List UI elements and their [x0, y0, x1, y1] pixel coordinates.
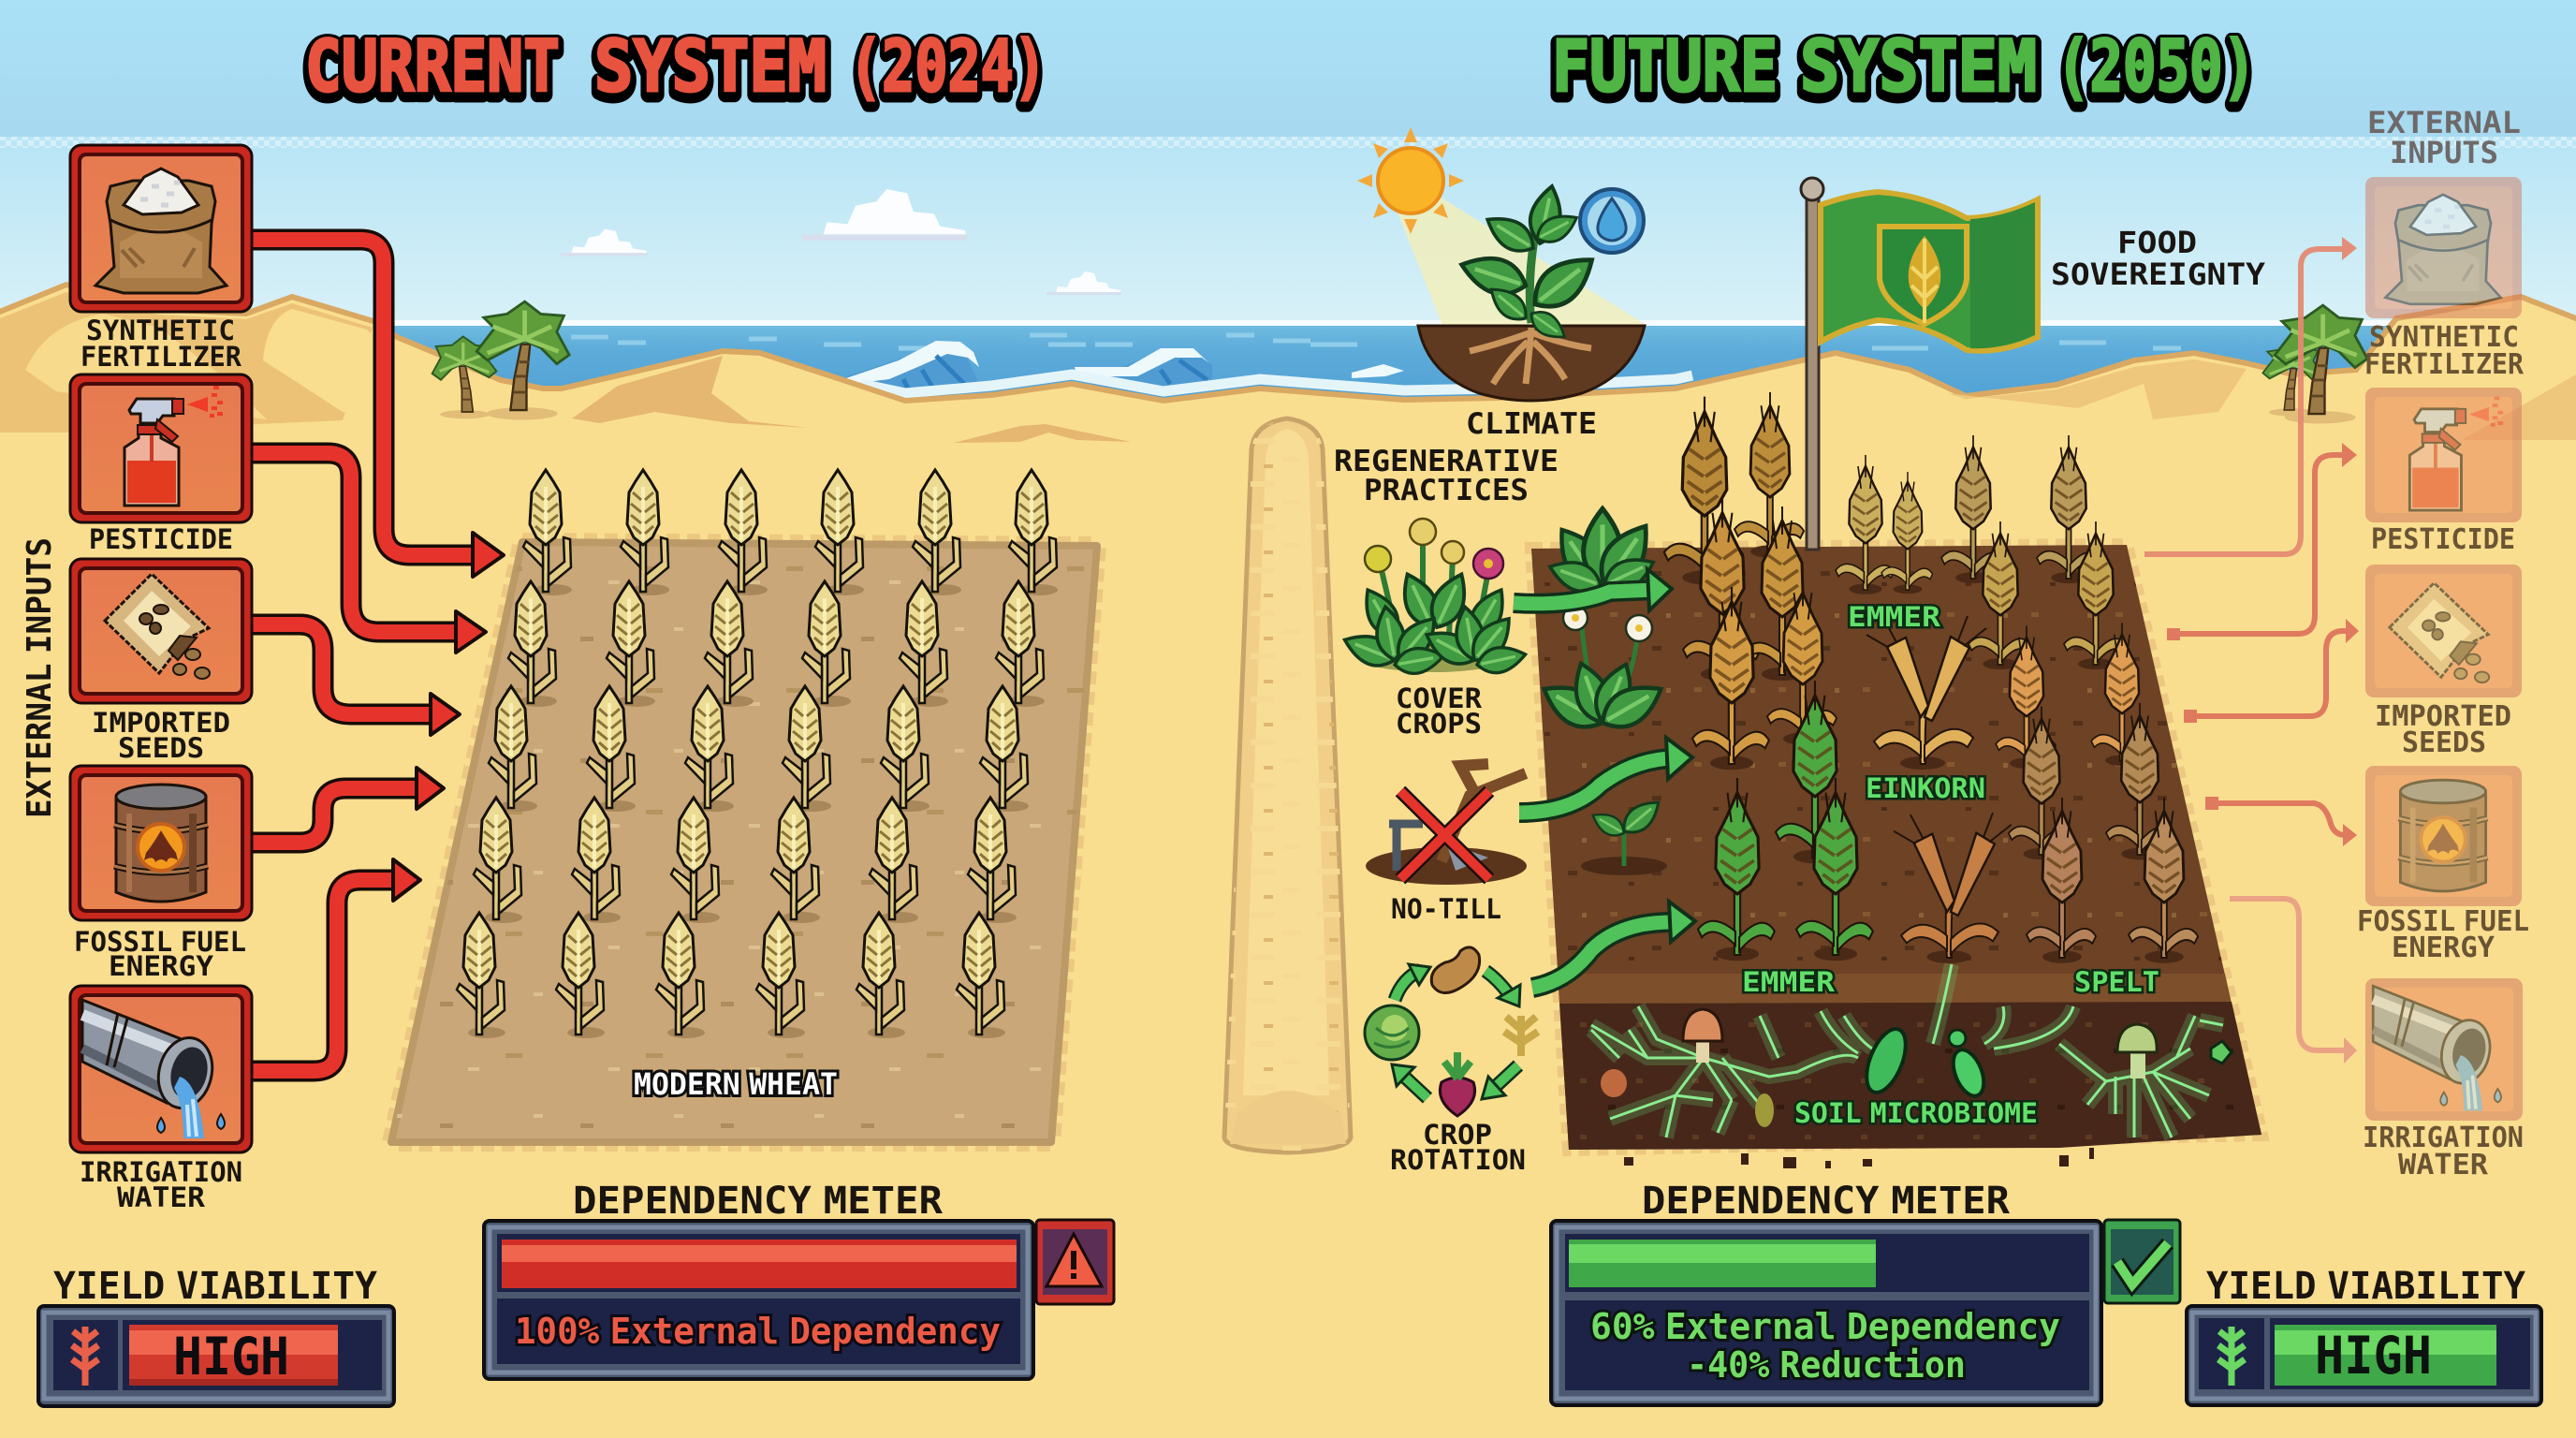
climate: sun	[1357, 127, 1647, 370]
faded input: imported seeds: SEEDS	[2402, 726, 2486, 759]
cover crops label: CROPS	[1396, 708, 1482, 740]
faded external inputs label: INPUTS	[2390, 135, 2498, 170]
crop name labels: EMMER	[1848, 601, 1941, 633]
input: imported seeds: IMPORTED	[92, 707, 230, 739]
modern wheat rows	[457, 470, 1058, 1038]
title: current system: (2024)	[849, 28, 1046, 111]
no-till label: NO-TILL	[1391, 893, 1501, 925]
arrow: crop rotation to soil	[1532, 902, 1695, 988]
check icon	[2104, 1220, 2180, 1303]
current yield viability gauge	[38, 1306, 394, 1406]
crop rotation label: ROTATION	[1390, 1144, 1526, 1176]
clouds	[561, 189, 1121, 295]
crop rotation label: CROP	[1423, 1119, 1492, 1151]
regenerative practices label: PRACTICES	[1364, 474, 1529, 507]
title: current system: SYSTEM	[594, 28, 827, 111]
title: current system	[305, 24, 1046, 111]
cover plants in field	[1536, 508, 1669, 875]
input: irrigation water: IRRIGATION	[80, 1156, 242, 1188]
input: imported seeds: SEEDS	[118, 732, 204, 764]
food sovereignty label: SOVEREIGNTY	[2051, 257, 2266, 292]
future yield viability label: YIELD VIABILITY	[2206, 1265, 2525, 1308]
title: future system	[1552, 24, 2256, 111]
cover crops label	[1396, 682, 1483, 740]
arrow: fertilizer to field	[252, 240, 504, 577]
input: fossil fuel energy: FOSSIL FUEL	[74, 926, 246, 958]
title: future system: SYSTEM	[1800, 28, 2037, 111]
faded input: pesticide	[2365, 388, 2522, 556]
title: future system: SYSTEM	[1800, 24, 2037, 108]
faded input: imported seeds: IMPORTED	[2375, 700, 2511, 733]
food sovereignty label: FOOD	[2117, 225, 2197, 260]
arrow: no-till to soil	[1519, 738, 1692, 813]
sand ridge divider	[1224, 418, 1351, 1152]
soil microbiome: mushrooms	[1683, 1009, 2232, 1078]
arrow: imported seeds to field	[252, 624, 460, 735]
arrow: pesticide to field	[252, 453, 486, 653]
future field: soil plot	[1531, 545, 2261, 1168]
faded external inputs label	[2367, 105, 2521, 170]
food sovereignty flag	[1821, 192, 2038, 351]
input: pesticide: PESTICIDE	[89, 523, 233, 555]
practice: no-till	[1366, 764, 1527, 885]
faded input: imported seeds	[2365, 565, 2522, 759]
title: current system: SYSTEM	[594, 24, 827, 108]
faded arrow: to irrigation	[2230, 899, 2357, 1064]
future dependency meter	[1551, 1221, 2101, 1405]
regenerative practices label	[1334, 445, 1559, 507]
faded input: irrigation water: WATER	[2398, 1149, 2489, 1181]
crop name labels	[1742, 601, 2159, 1129]
food sovereignty label	[2051, 225, 2266, 292]
future dependency meter label: DEPENDENCY METER	[1642, 1180, 2011, 1223]
current yield viability gauge: HIGH	[173, 1327, 289, 1387]
warning icon	[1036, 1220, 1114, 1304]
soil microbiome: mycelium network	[1591, 964, 2223, 1137]
crop name labels: EINKORN	[1866, 772, 1985, 804]
ocean waves	[846, 341, 1692, 404]
future yield viability gauge	[2187, 1306, 2541, 1405]
lower sky	[0, 148, 2576, 328]
faded input: synthetic fertilizer	[2364, 177, 2525, 381]
sea	[0, 320, 2576, 414]
faded input: irrigation water	[2363, 978, 2524, 1181]
crop name labels: EMMER	[1742, 966, 1836, 998]
title: future system: (2050)	[2056, 24, 2256, 108]
faded external inputs label: EXTERNAL	[2367, 105, 2521, 140]
crop name labels: SOIL MICROBIOME	[1794, 1097, 2038, 1129]
climate: plant in soil	[1418, 183, 1645, 401]
arrow: fossil fuel to field	[252, 768, 444, 843]
palm trees left	[432, 301, 569, 419]
faded input: synthetic fertilizer: SYNTHETIC	[2369, 321, 2519, 354]
faded arrow: to fertilizer	[2144, 237, 2357, 554]
input: synthetic fertilizer: FERTILIZER	[80, 341, 242, 373]
input: synthetic fertilizer: SYNTHETIC	[86, 315, 235, 346]
input: synthetic fertilizer	[70, 145, 252, 373]
faded input: pesticide: PESTICIDE	[2371, 523, 2515, 556]
palm trees right	[2262, 305, 2367, 423]
title: future system: FUTURE	[1552, 28, 1778, 111]
current dependency meter: 100% External Dependency	[515, 1311, 1001, 1352]
current dependency meter	[484, 1221, 1033, 1379]
modern wheat label: MODERN WHEAT	[634, 1066, 838, 1102]
faded input: fossil fuel energy: ENERGY	[2392, 932, 2495, 964]
current field: modern wheat plot	[391, 542, 1097, 1142]
heritage wheat plants	[1664, 392, 2198, 963]
input: irrigation water: WATER	[117, 1181, 206, 1213]
input: irrigation water	[70, 986, 252, 1213]
faded arrow: to seeds	[2184, 619, 2359, 723]
title: future system: (2050)	[2056, 28, 2256, 111]
soil microbiome: bacteria	[1601, 1023, 1990, 1127]
title: current system: (2024)	[849, 24, 1046, 108]
climate label: CLIMATE	[1466, 407, 1597, 441]
external inputs vertical label: EXTERNAL INPUTS	[21, 537, 59, 818]
crop name labels: SPELT	[2074, 966, 2159, 998]
sky band with title area	[0, 0, 2576, 139]
faded input: fossil fuel energy	[2357, 766, 2529, 964]
climate: water drop badge	[1580, 189, 1644, 253]
arrow: irrigation to field	[252, 859, 420, 1071]
future yield viability gauge: HIGH	[2315, 1326, 2432, 1386]
future dependency meter: -40% Reduction	[1687, 1344, 1966, 1386]
faded input: irrigation water: IRRIGATION	[2363, 1122, 2524, 1154]
input: fossil fuel energy: ENERGY	[109, 950, 214, 982]
faded input: fossil fuel energy: FOSSIL FUEL	[2357, 905, 2529, 938]
title: future system: FUTURE	[1552, 24, 1778, 108]
flag pole	[1801, 178, 1823, 550]
current dependency meter label: DEPENDENCY METER	[573, 1180, 944, 1223]
arrow: cover crops to soil	[1514, 569, 1672, 610]
faded input: synthetic fertilizer: FERTILIZER	[2364, 348, 2525, 381]
crop rotation label	[1390, 1119, 1526, 1176]
faded arrow: to pesticide	[2167, 443, 2357, 640]
input: imported seeds	[70, 559, 252, 764]
faded arrow: to fossil fuel	[2205, 797, 2357, 846]
input: fossil fuel energy	[70, 766, 252, 982]
practice: cover crops	[1339, 519, 1528, 677]
cover crops label: COVER	[1396, 682, 1483, 714]
title: current system: CURRENT	[305, 24, 560, 108]
title: current system: CURRENT	[305, 28, 560, 111]
input: pesticide	[70, 374, 252, 555]
practice: crop rotation cycle	[1365, 947, 1538, 1116]
current yield viability label: YIELD VIABILITY	[53, 1265, 377, 1308]
regenerative practices label: REGENERATIVE	[1334, 445, 1559, 478]
future dependency meter: 60% External Dependency	[1590, 1306, 2060, 1347]
